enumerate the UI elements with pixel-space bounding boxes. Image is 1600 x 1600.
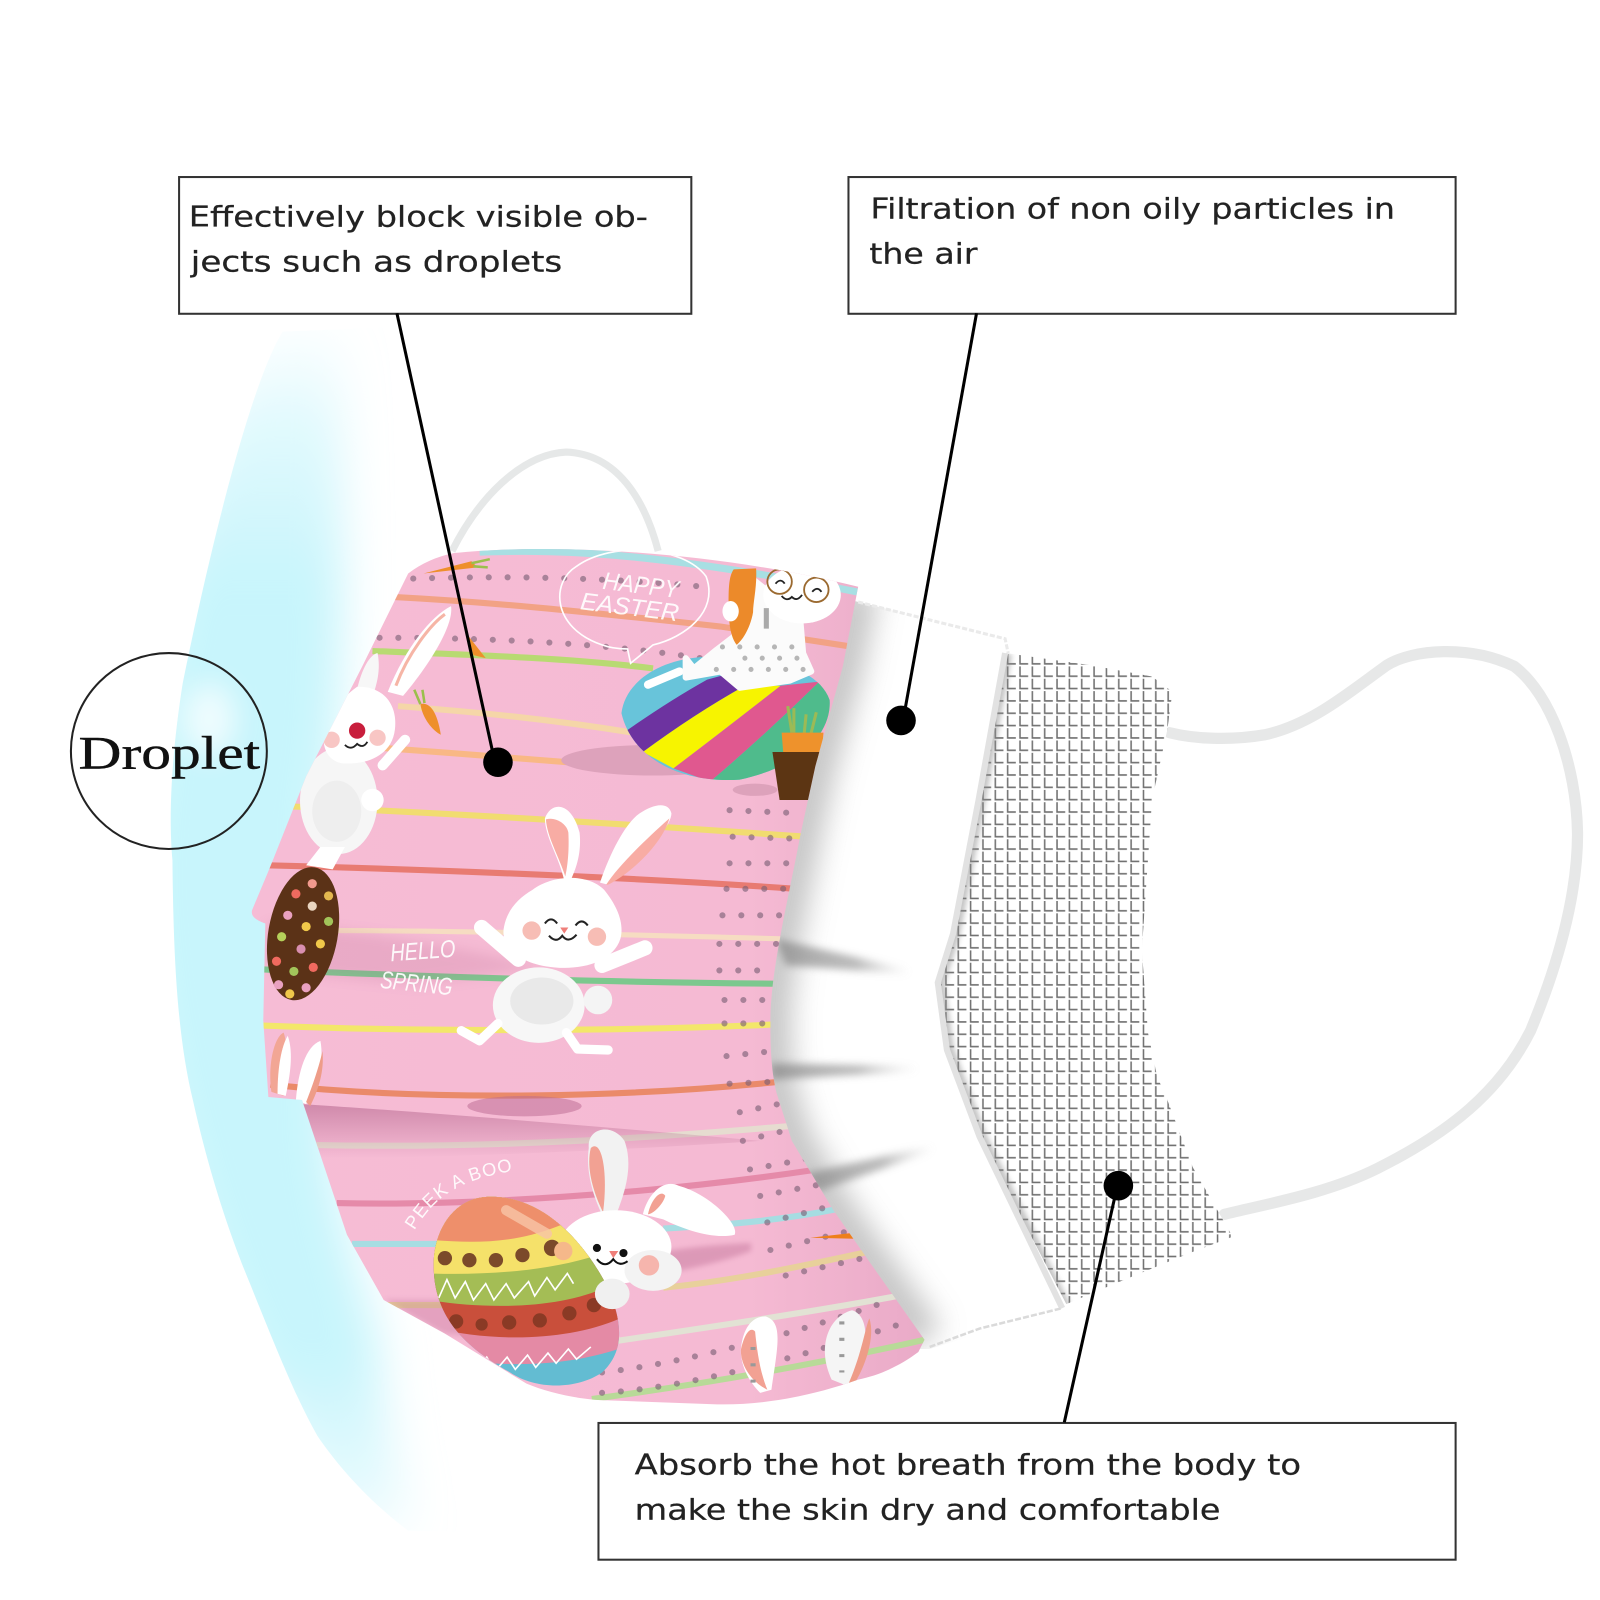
callout box: droplets [179, 177, 691, 314]
illustration: rainbow easter egg [622, 657, 830, 780]
stripes on mask fabric [263, 551, 929, 1399]
callout box: droplets: jects such as droplets [190, 244, 562, 278]
illustration: chocolate egg [266, 867, 340, 1000]
callout box: hot breath: Absorb the hot breath from the body to [635, 1447, 1301, 1481]
callout: droplet circle: Droplet [79, 727, 260, 779]
illustration: bottom right bunny ears [741, 1310, 871, 1393]
illustration: flower pot with carrots [733, 706, 824, 800]
callout box: filtration [848, 177, 1456, 314]
dotted rows on mask fabric [380, 577, 908, 1393]
panel: white filter layer [770, 600, 1065, 1349]
panel: blue droplet spray arc [170, 347, 410, 1521]
speech bubble: happy easter [560, 550, 709, 663]
callout box: hot breath: make the skin dry and comfortable [635, 1492, 1220, 1526]
illustration: bottom left bunny ears [270, 1033, 323, 1106]
illustration: left bunny reaching up [300, 606, 451, 869]
illustration: large decorated easter egg [434, 1196, 630, 1386]
icon: side ear loop [1169, 652, 1578, 1214]
egg shadow [561, 745, 686, 776]
panel: pink printed mask front [252, 549, 924, 1404]
illustration: central jumping bunny [461, 805, 671, 1050]
arrow: leader to printed layer [397, 313, 513, 777]
callout box: hot breath [598, 1423, 1456, 1560]
text: hello spring: SPRING [379, 967, 454, 1001]
text: hello spring: HELLO [389, 936, 456, 967]
illustration: top right bunny with carrot and glasses [686, 566, 841, 688]
arrow: leader to absorbent layer [1064, 1171, 1133, 1422]
fabric fold shadows [267, 923, 760, 1337]
callout box: filtration: Filtration of non oily particles in [870, 191, 1395, 225]
label: peek a boo lettering: PEEK A BOO [404, 1160, 511, 1230]
icon: top ear loop [452, 452, 658, 551]
text: hello spring [380, 940, 455, 995]
callout box: droplets: Effectively block visible ob- [189, 200, 648, 234]
speech bubble: happy easter: HAPPY [601, 568, 682, 604]
arrow: leader to filter layer [886, 313, 977, 735]
callout box: filtration: the air [869, 236, 978, 270]
illustration: bottom bunny peeking [559, 1129, 735, 1291]
speech bubble: happy easter: EASTER [579, 588, 680, 627]
callout: droplet circle [71, 653, 267, 849]
illustration: carrots [414, 559, 855, 1239]
panel: grey absorbent inner layer grid [941, 653, 1231, 1304]
